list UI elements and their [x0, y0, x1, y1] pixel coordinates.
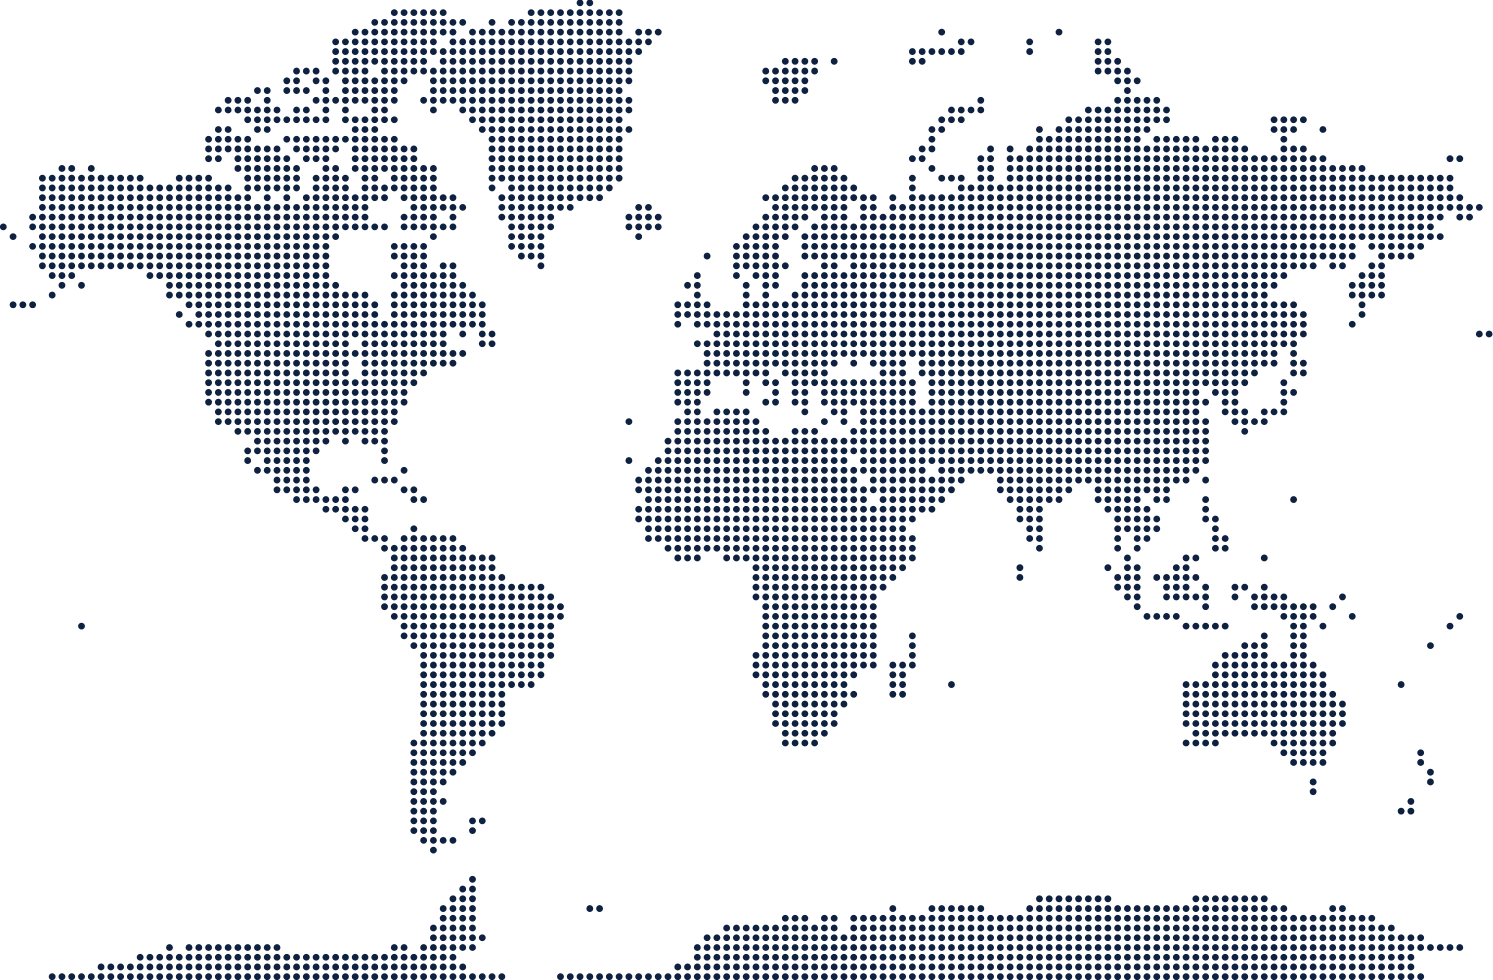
landmass: Antarctica	[52, 879, 1460, 977]
landmass: Eurasia, Africa and nearby islands	[629, 32, 1489, 743]
landmass: North America, Greenland and South America	[3, 3, 658, 850]
landmass: Australia, New Guinea and Pacific islands	[1186, 587, 1460, 811]
